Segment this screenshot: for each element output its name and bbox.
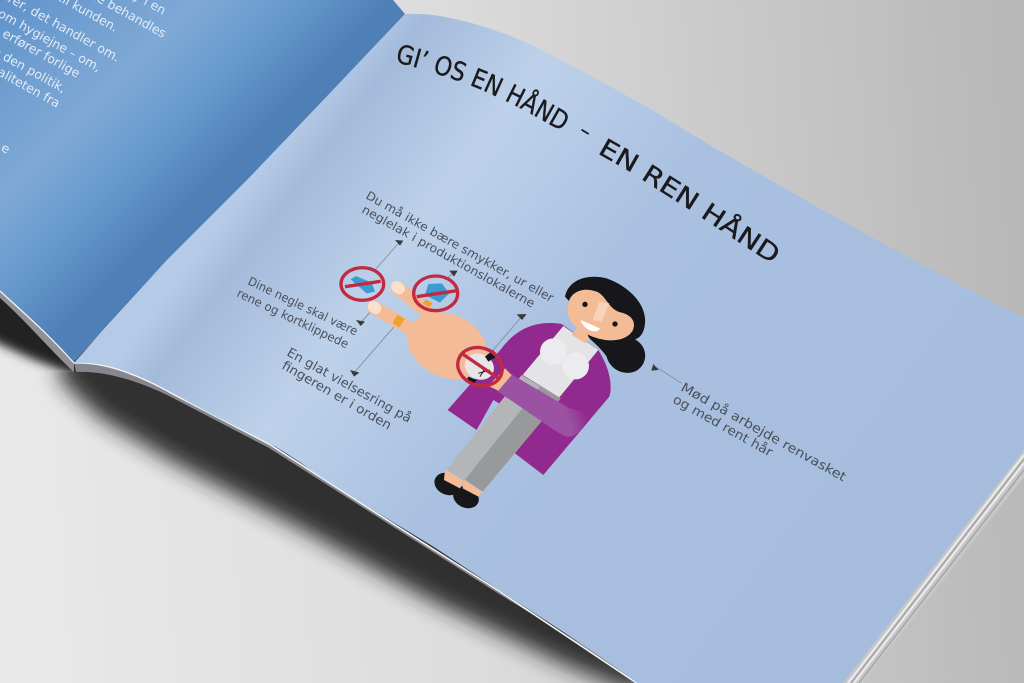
icon: no nail polish — [414, 276, 458, 311]
icon: no watch — [456, 346, 504, 388]
face — [567, 290, 634, 340]
callout: jewellery text: Du må ikke bære smykker, ur eller — [364, 188, 556, 305]
book shadow — [0, 270, 650, 683]
smile — [581, 320, 600, 331]
callout: hair text: Mød på arbejde renvasket — [678, 380, 848, 485]
title: – — [575, 118, 596, 143]
coat — [448, 323, 611, 475]
hand — [408, 312, 488, 379]
title — [353, 45, 778, 310]
trousers — [447, 375, 561, 492]
callout: ring text: En glat vielsesring på — [284, 345, 414, 426]
page stack edge — [0, 290, 1024, 683]
callout: hair text: og med rent hår — [670, 392, 776, 461]
callout: ring text: fingeren er i orden — [279, 358, 394, 433]
illustration: woman with hand — [341, 240, 682, 512]
left page body text: erfører forlige — [0, 26, 83, 81]
callout: jewellery text: neglelak i produktionslokalerne — [360, 202, 537, 311]
icon: no ring — [341, 268, 384, 300]
title: EN REN HÅND — [599, 138, 778, 260]
wedding ring — [393, 314, 405, 328]
shoes and ankles — [434, 470, 482, 508]
fingers — [397, 287, 437, 320]
callout: nails text: Dine negle skal være — [246, 274, 360, 338]
nose and eyes — [593, 302, 609, 322]
sleeve — [497, 374, 588, 437]
title: GI’ OS EN HÅND — [398, 45, 568, 128]
neck — [572, 328, 592, 343]
left page body text — [0, 0, 169, 157]
panel: left page — [0, 0, 420, 380]
shirt — [523, 326, 598, 397]
callout: nails text: rene og kortklippede — [235, 286, 351, 351]
arrows — [350, 240, 682, 383]
hair back — [565, 277, 645, 373]
